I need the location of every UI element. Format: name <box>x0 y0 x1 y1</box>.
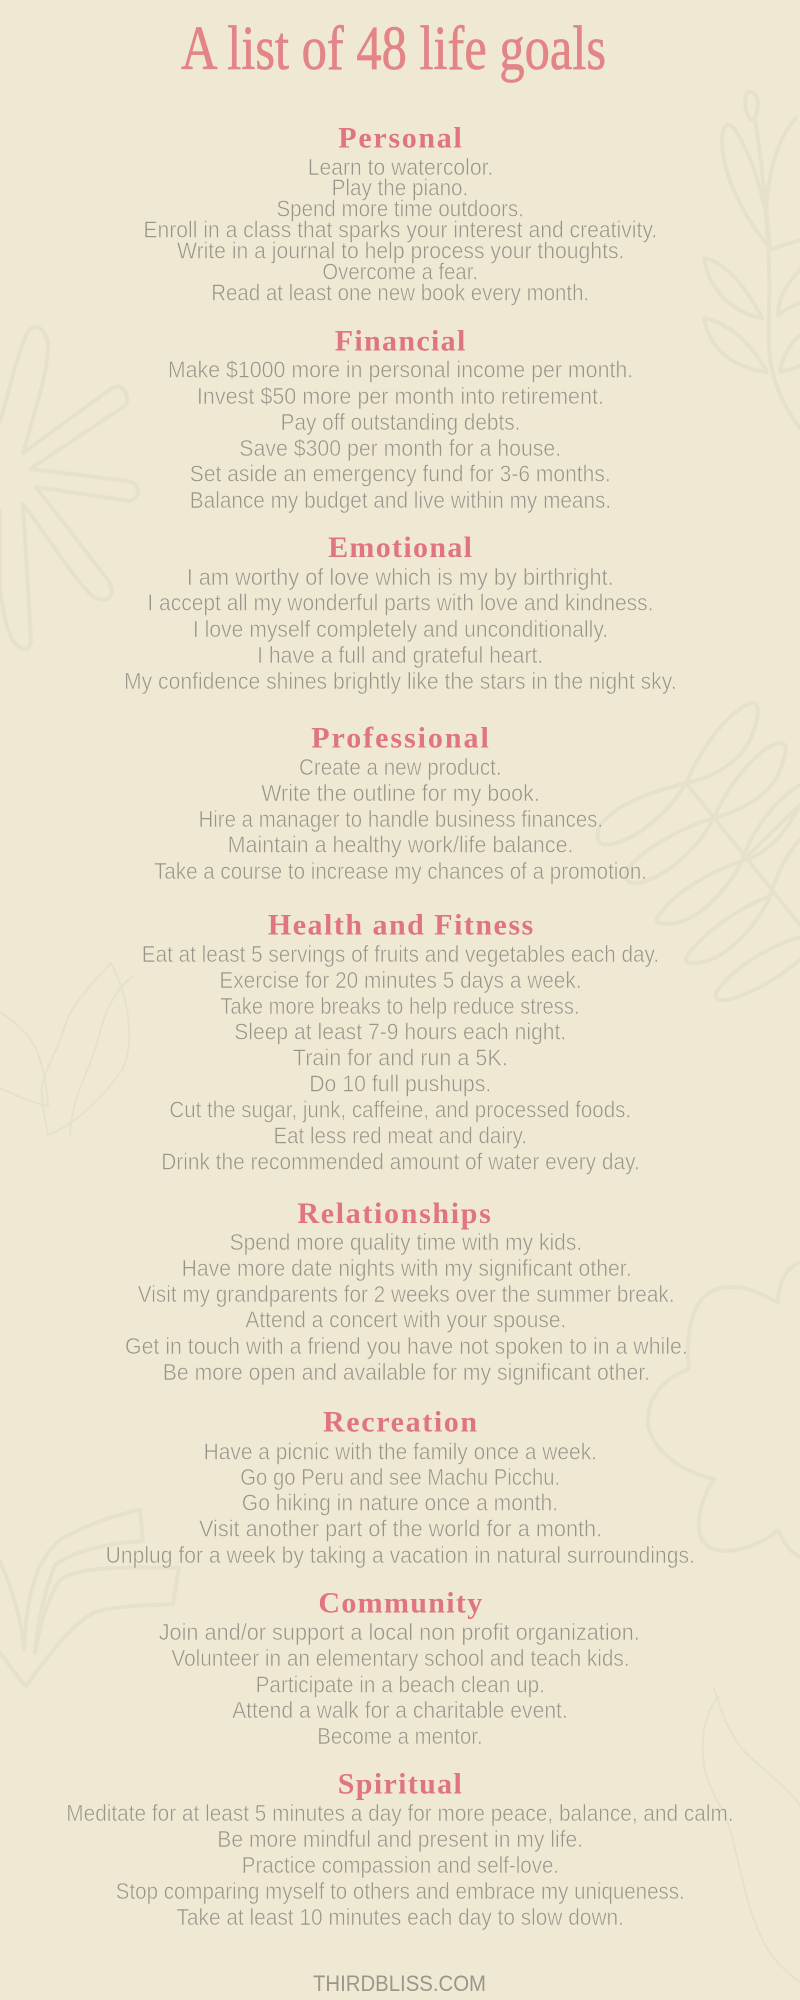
panel: Professional <box>154 721 647 884</box>
list: Financial goals: Save $300 per month for a house. <box>239 435 561 461</box>
panel: Community <box>159 1586 640 1749</box>
heading: Spiritual: Spiritual <box>338 1767 462 1800</box>
list: Health and Fitness goals: Train for and run a 5K. <box>293 1045 508 1071</box>
list: Professional goals: Maintain a healthy work/life balance. <box>228 832 574 858</box>
list: Recreation goals <box>106 1438 695 1568</box>
list: Emotional goals: I am worthy of love which is my by birthright. <box>187 564 614 590</box>
footer: website credit: THIRDBLISS.COM <box>313 1971 486 1996</box>
list: Emotional goals: I love myself completely and unconditionally. <box>193 616 608 642</box>
list: Relationships goals: Attend a concert with your spouse. <box>245 1307 566 1333</box>
list: Professional goals: Hire a manager to handle business finances. <box>198 806 603 832</box>
list: Spiritual goals: Take at least 10 minutes each day to slow down. <box>176 1904 624 1930</box>
list: Recreation goals: Unplug for a week by taking a vacation in natural surroundings. <box>106 1542 695 1568</box>
heading: Personal: Personal <box>338 121 462 154</box>
icon: left leaves decoration <box>0 963 132 1135</box>
list: Emotional goals <box>124 564 677 694</box>
list: Relationships goals: Get in touch with a friend you have not spoken to in a while. <box>125 1333 688 1359</box>
panel: Health and Fitness <box>142 908 659 1175</box>
list: Professional goals: Create a new product. <box>299 754 502 780</box>
icon: right flower outline decoration <box>648 1262 800 1557</box>
list: Relationships goals: Visit my grandparents for 2 weeks over the summer break. <box>138 1281 675 1307</box>
heading: Emotional: Emotional <box>328 531 472 564</box>
list: Health and Fitness goals: Eat less red meat and dairy. <box>274 1122 527 1148</box>
list: Relationships goals: Have more date nights with my significant other. <box>182 1255 632 1281</box>
list: Health and Fitness goals: Take more breaks to help reduce stress. <box>220 993 580 1019</box>
list: Emotional goals: My confidence shines brightly like the stars in the night sky. <box>124 668 677 694</box>
list: Health and Fitness goals: Sleep at least 7-9 hours each night. <box>234 1019 566 1045</box>
list: Personal goals: Read at least one new book every month. <box>211 280 589 306</box>
list: Community goals: Volunteer in an elementary school and teach kids. <box>171 1645 630 1671</box>
heading: Recreation: Recreation <box>323 1406 477 1439</box>
list: Personal goals: Enroll in a class that sparks your interest and creativity. <box>143 216 657 242</box>
list: Community goals: Join and/or support a local non profit organization. <box>159 1619 640 1645</box>
list: Emotional goals: I accept all my wonderful parts with love and kindness. <box>147 590 654 616</box>
heading: Relationships: Relationships <box>297 1197 491 1230</box>
list: Emotional goals: I have a full and grateful heart. <box>257 642 543 668</box>
title: A list of 48 life goals <box>181 15 606 83</box>
list: Recreation goals: Have a picnic with the family once a week. <box>204 1438 597 1464</box>
list: Personal goals: Learn to watercolor. <box>308 154 493 180</box>
panel: Relationships <box>125 1197 688 1385</box>
list: Personal goals <box>143 154 657 306</box>
list: Health and Fitness goals: Exercise for 20 minutes 5 days a week. <box>219 967 582 993</box>
list: Personal goals: Spend more time outdoors. <box>276 196 524 222</box>
icon: left flower decoration <box>0 327 138 649</box>
icon: right leaf branch decoration <box>598 703 800 1000</box>
list: Financial goals: Invest $50 more per month into retirement. <box>197 383 604 409</box>
list: Spiritual goals <box>66 1800 734 1930</box>
list: Recreation goals: Visit another part of the world for a month. <box>199 1516 602 1542</box>
list: Spiritual goals: Stop comparing myself to others and embrace my uniqueness. <box>116 1878 685 1904</box>
heading: Health and Fitness: Health and Fitness <box>268 908 533 941</box>
panel: Recreation <box>106 1406 695 1568</box>
list: Spiritual goals: Practice compassion and self-love. <box>242 1852 559 1878</box>
list: Health and Fitness goals: Drink the recommended amount of water every day. <box>161 1149 640 1175</box>
list: Professional goals <box>154 754 647 884</box>
panel: Personal <box>143 121 657 306</box>
list: Personal goals: Write in a journal to help process your thoughts. <box>177 238 624 264</box>
list: Financial goals: Set aside an emergency fund for 3-6 months. <box>190 461 611 487</box>
list: Spiritual goals: Meditate for at least 5 minutes a day for more peace, balance, and calm. <box>66 1800 734 1826</box>
list: Community goals: Attend a walk for a charitable event. <box>232 1697 568 1723</box>
list: Professional goals: Take a course to increase my chances of a promotion. <box>154 858 647 884</box>
list: Financial goals <box>168 357 633 513</box>
list: Relationships goals: Spend more quality time with my kids. <box>230 1229 582 1255</box>
list: Financial goals: Make $1000 more in personal income per month. <box>168 357 633 383</box>
list: Relationships goals: Be more open and available for my significant other. <box>163 1359 650 1385</box>
list: Health and Fitness goals: Do 10 full pushups. <box>309 1070 491 1096</box>
list: Community goals: Participate in a beach clean up. <box>256 1671 545 1697</box>
list: Community goals <box>159 1619 640 1749</box>
list: Health and Fitness goals <box>142 941 659 1175</box>
heading: Community: Community <box>318 1586 482 1620</box>
heading: Financial: Financial <box>335 324 465 357</box>
list: Community goals: Become a mentor. <box>317 1723 483 1749</box>
icon: lower left plant decoration <box>0 1510 179 1686</box>
list: Recreation goals: Go go Peru and see Machu Picchu. <box>240 1464 560 1490</box>
panel: Spiritual <box>66 1767 734 1930</box>
list: Financial goals: Pay off outstanding debts. <box>281 409 520 435</box>
list: Health and Fitness goals: Cut the sugar, junk, caffeine, and processed foods. <box>169 1096 631 1122</box>
list: Financial goals: Balance my budget and live within my means. <box>190 487 611 513</box>
icon: top right plant decoration <box>704 92 800 428</box>
list: Health and Fitness goals: Eat at least 5 servings of fruits and vegetables each day. <box>142 941 659 967</box>
list: Spiritual goals: Be more mindful and present in my life. <box>217 1826 583 1852</box>
heading: Professional: Professional <box>311 721 489 754</box>
list: Personal goals: Overcome a fear. <box>322 258 478 284</box>
list: Professional goals: Write the outline for my book. <box>261 780 540 806</box>
panel: Financial <box>168 324 633 513</box>
icon: lower right plant decoration <box>703 1688 800 1982</box>
list: Recreation goals: Go hiking in nature once a month. <box>242 1490 558 1516</box>
list: Personal goals: Play the piano. <box>332 174 468 200</box>
list: Relationships goals <box>125 1229 688 1385</box>
panel: Emotional <box>124 531 677 694</box>
